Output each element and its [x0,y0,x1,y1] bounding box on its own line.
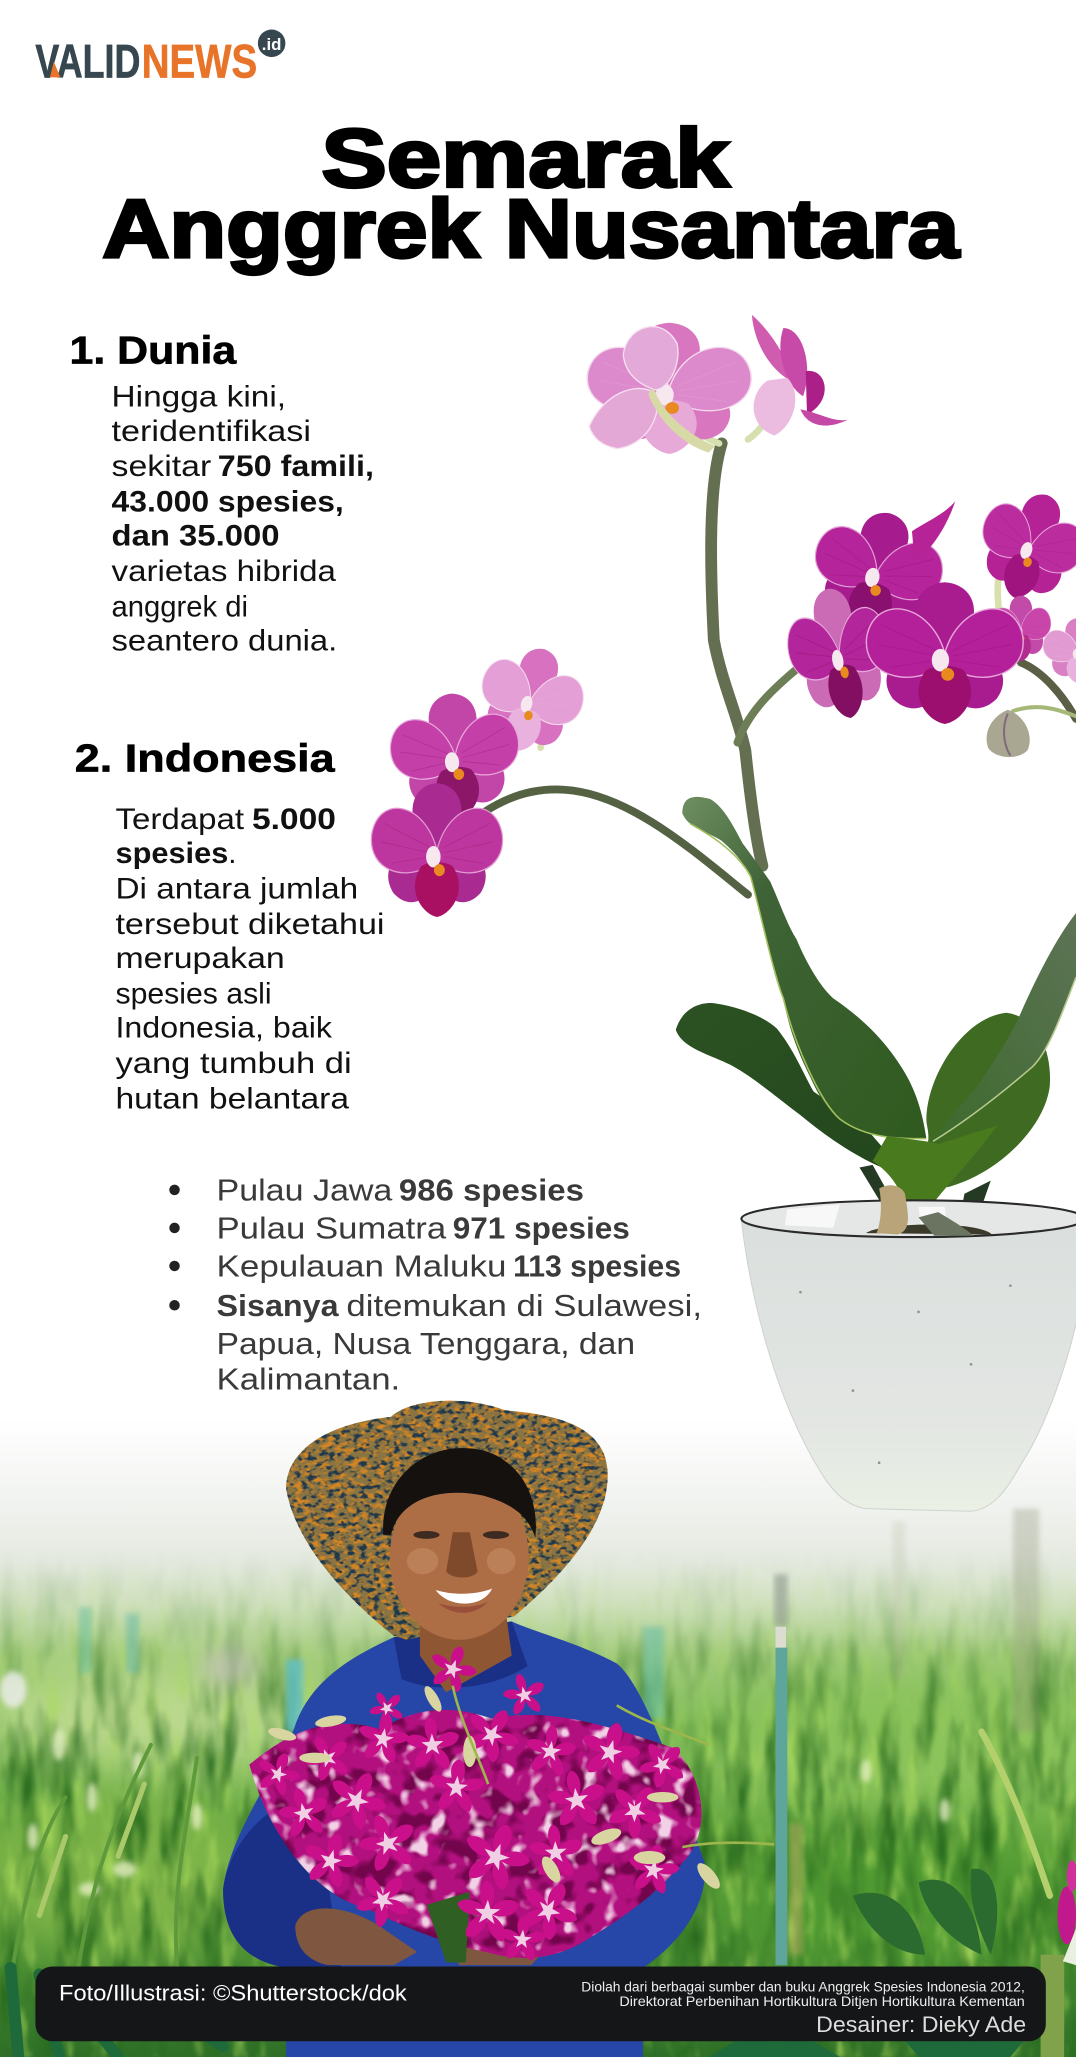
bullet list: Pulau Jawa [217,1174,393,1207]
designer credit: Desainer: Dieky Ade [816,2012,1026,2037]
hat [286,1401,608,1640]
orchid flower: right side [779,580,900,727]
text block: Dunia: teridentifikasi [112,415,311,448]
text block: Indonesia: Indonesia, baik [115,1012,332,1045]
bouquet [249,1638,774,1963]
foliage bottom right [709,1732,1064,2057]
bullet list: 986 spesies [399,1174,584,1207]
face [390,1475,529,1640]
title [102,111,960,275]
bullet list [169,1174,702,1396]
bullet list: 113 spesies [513,1250,681,1283]
text block: Dunia: varietas hibrida [112,555,337,588]
shirt shading [223,1621,528,1968]
text block: Indonesia: Terdapat [115,803,244,836]
text block: Indonesia: merupakan [115,942,285,975]
orchid flower: lower left [371,783,503,917]
text block: Indonesia: spesies [115,837,228,870]
foliage bottom left [10,1745,223,2057]
text block: Dunia: Hingga kini, [112,381,286,414]
bullet list: Kepulauan Maluku [217,1250,507,1283]
bullet list: ditemukan di Sulawesi, [346,1290,702,1323]
flower pot [741,1185,1076,1511]
photo credit: Foto/Illustrasi: ©Shutterstock/dok [59,1981,408,2006]
source note [581,1979,1025,2009]
section 2: Indonesia [75,736,384,1116]
title: Semarak [321,111,731,204]
orchid flower: right mid [991,596,1051,661]
logo [35,30,285,88]
orchid flower: right back [802,500,952,645]
orchid leaves [676,797,1076,1217]
title: Anggrek Nusantara [102,182,960,275]
text block: Indonesia [115,803,384,1116]
text block: Indonesia: hutan belantara [115,1083,350,1116]
orchid flower at right edge [1058,1860,1076,1965]
logo: .id [262,35,281,54]
text block: Dunia: dan 35.000 [112,520,279,553]
logo: VALID [35,35,140,88]
blue shirt [223,1621,705,2057]
facial features [407,1531,516,1613]
bullet list: Pulau Sumatra [217,1212,446,1245]
orchid flower: edge pale [1043,618,1076,683]
source note: Direktorat Perbenihan Hortikultura Ditjen Hortikultura Kementan [619,1994,1025,2009]
text block: Indonesia: yang tumbuh di [115,1047,352,1080]
text block: Indonesia: tersebut diketahui [115,908,384,941]
orchid flower: left magenta [387,689,524,822]
bullet list: 971 spesies [453,1212,630,1245]
logo: NEWS [142,35,257,88]
heading: Dunia: 1. Dunia [70,328,237,372]
heading: Indonesia: 2. Indonesia [75,736,336,780]
source note: Diolah dari berbagai sumber dan buku Anggrek Spesies Indonesia 2012, [581,1979,1025,1994]
neck [420,1607,512,1692]
woman with orchid bouquet [223,1401,774,2057]
text block: Dunia: anggrek di [112,591,248,624]
bullet list: Kalimantan. [217,1363,400,1396]
orchid flower: right big [866,582,1023,724]
orchid plant [371,315,1076,1217]
orchid flower: right top [965,479,1076,613]
footer bar [35,1966,1046,2041]
text block: Indonesia: 5.000 [252,803,336,836]
text block: Dunia: sekitar [112,450,211,483]
orchid stems [462,383,1076,895]
text block: Dunia: 750 famili, [218,450,374,483]
section 1: Dunia [70,328,374,658]
text block: Dunia: 43.000 spesies, [112,486,344,519]
text block: Indonesia: . [228,837,237,870]
text block: Dunia: seantero dunia. [112,625,337,658]
bullet list: Sisanya [217,1290,339,1323]
orchid bud [987,710,1030,757]
orchid flower: left pale [468,636,594,764]
hands [295,1908,541,1965]
orchid flower: top pale [587,323,751,454]
text block: Indonesia: Di antara jumlah [115,873,358,906]
orchid flower: top side view [752,315,848,436]
hair [383,1448,536,1538]
text block: Indonesia: spesies asli [115,978,272,1011]
pole in the field [774,1574,787,1965]
text block: Dunia [112,381,374,658]
bullet list: Papua, Nusa Tenggara, dan [217,1328,635,1361]
